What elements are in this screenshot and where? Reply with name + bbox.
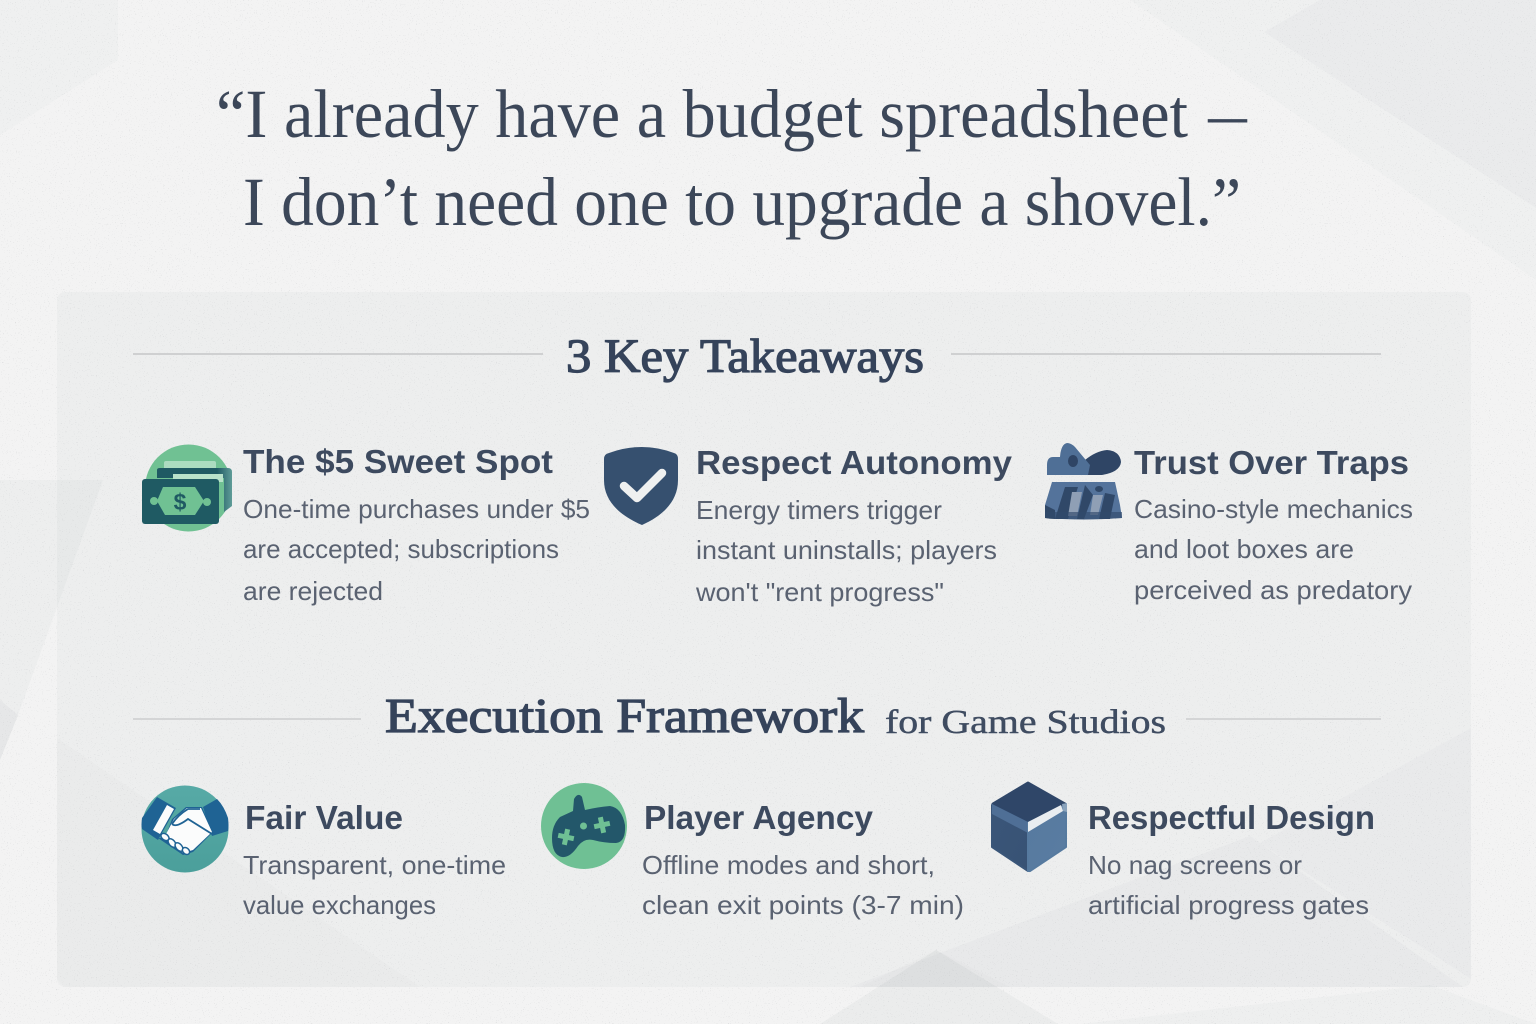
description: perceived as predatory: [1134, 575, 1412, 605]
title: Respectful Design: [1088, 799, 1375, 836]
description: value exchanges: [243, 890, 436, 920]
icon: money: $: [174, 489, 187, 515]
title: The $5 Sweet Spot: [243, 443, 553, 480]
framework: respectful design: [992, 783, 1375, 920]
description: clean exit points (3-7 min): [642, 890, 964, 920]
quote title: —: [1207, 76, 1248, 152]
description: [642, 850, 964, 920]
description: artificial progress gates: [1088, 890, 1369, 920]
heading: execution framework: [133, 688, 1381, 743]
takeaway: respect autonomy: [604, 444, 1013, 607]
title: Respect Autonomy: [696, 444, 1013, 481]
description: are rejected: [243, 576, 383, 606]
description: [695, 495, 997, 607]
quote title: “I already have a budget spreadsheet: [216, 76, 1188, 152]
title: Player Agency: [644, 799, 874, 836]
framework: player agency: [541, 783, 964, 920]
heading: execution framework: Execution Framework: [385, 688, 865, 743]
description: One-time purchases under $5: [243, 494, 590, 524]
description: [243, 494, 590, 606]
description: [1088, 850, 1369, 920]
description: No nag screens or: [1088, 850, 1302, 880]
quote title: I don’t need one to upgrade a shovel.”: [243, 164, 1241, 240]
icon: game controller: [541, 783, 627, 869]
description: won't "rent progress": [695, 577, 944, 607]
quote title: [216, 76, 1248, 240]
icon: shield check: [604, 447, 678, 525]
description: [243, 850, 506, 920]
description: Offline modes and short,: [642, 850, 935, 880]
description: Casino-style mechanics: [1134, 494, 1413, 524]
description: Energy timers trigger: [696, 495, 942, 525]
icon: trap: [1045, 443, 1122, 520]
icon: money: [142, 444, 232, 532]
title: Trust Over Traps: [1134, 444, 1409, 481]
heading: execution framework: for Game Studios: [885, 704, 1166, 741]
heading: 3 Key Takeaways: 3 Key Takeaways: [566, 330, 924, 383]
takeaway: the $5 sweet spot: [142, 443, 590, 606]
framework: fair value: [142, 786, 506, 920]
icon: handshake: [142, 786, 228, 872]
description: are accepted; subscriptions: [243, 534, 559, 564]
takeaway: trust over traps: [1045, 443, 1413, 605]
title: Fair Value: [245, 799, 403, 836]
description: Transparent, one-time: [243, 850, 506, 880]
description: instant uninstalls; players: [696, 535, 997, 565]
description: and loot boxes are: [1134, 534, 1354, 564]
description: [1134, 494, 1413, 605]
icon: cube: [992, 783, 1067, 871]
